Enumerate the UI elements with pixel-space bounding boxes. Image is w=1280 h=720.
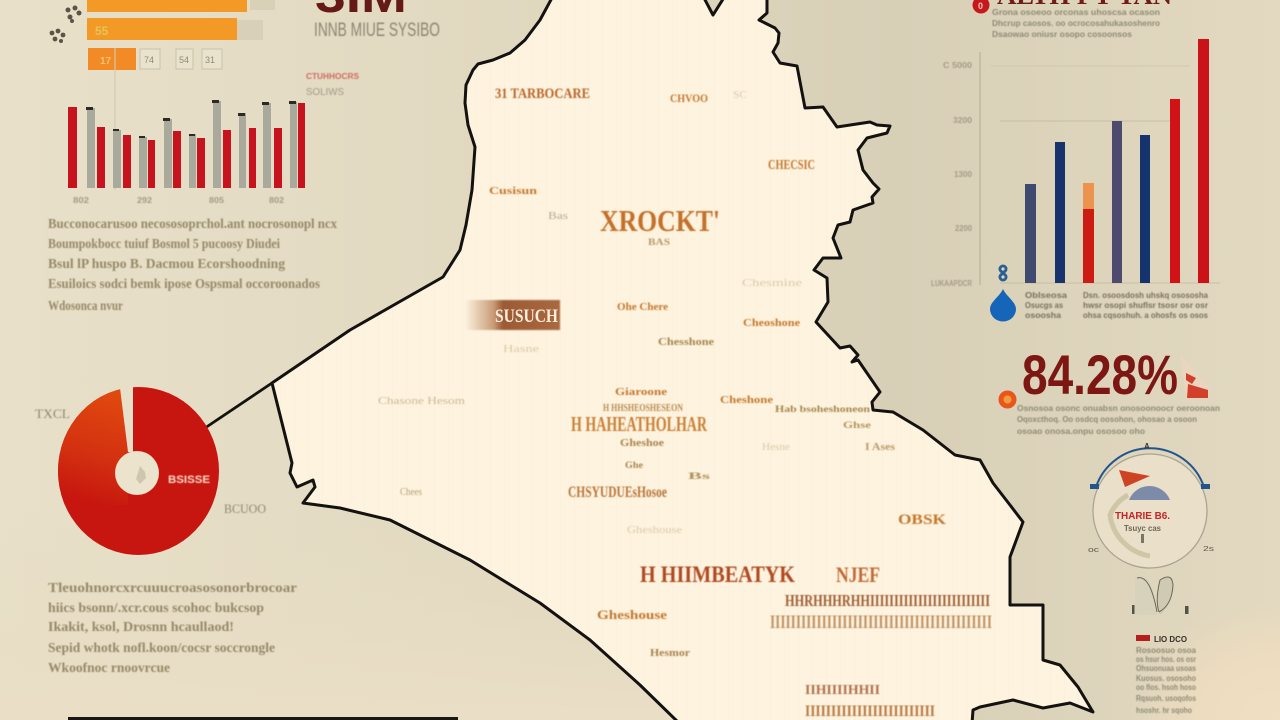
top orange progress bars: 74	[144, 55, 154, 65]
map labels: SC	[733, 90, 747, 101]
text block: top right	[992, 8, 1160, 39]
map labels: Hesne	[762, 442, 791, 453]
map labels: HHRHHHRHHIIIIIIIIIIIIIIIIIIIIIIIII	[785, 591, 990, 610]
map labels: Gheshouse	[597, 607, 667, 622]
top orange progress bars: 31	[205, 55, 215, 65]
text block: under right chart: Dsn. osoosdosh uhskq osososha	[1083, 291, 1209, 300]
circular gauge diagram: Tsuyc cas	[1124, 524, 1162, 533]
text block: lower right: Ohsuonuaa usoas	[1136, 664, 1196, 673]
map labels: H HHSHEOSHESEON	[603, 403, 684, 414]
bar chart: left: 802	[269, 196, 285, 205]
icon: orange circle	[998, 390, 1016, 408]
map labels: 31 TARBOCARE	[495, 86, 590, 102]
map labels: Bs	[688, 471, 711, 481]
text block: lower right	[1136, 646, 1197, 715]
icon: small blue glyph	[998, 264, 1008, 282]
text block: lower right: Rosoosuo osoa	[1136, 646, 1197, 655]
map labels: IIHIIIIHHII	[805, 683, 880, 698]
bottom black rule	[68, 717, 458, 720]
bar chart: left: 802	[73, 196, 90, 205]
map labels: Gheshouse	[627, 525, 683, 536]
text block: top right: Grona osoeoo orconas uhoscsa ocason	[992, 8, 1160, 17]
map of the country	[205, 0, 1093, 720]
top orange progress bars: 54	[179, 55, 189, 65]
map labels: Chasone Hesom	[378, 396, 465, 407]
bar chart: left: 805	[209, 196, 225, 205]
map labels: CHSYUDUEsHosoe	[568, 484, 667, 501]
map labels: H HAHEATHOLHAR	[571, 412, 708, 436]
text block: under right chart: Oblseosa	[1025, 291, 1068, 300]
map labels: IIIIIIIIIIIIIIIIIIIIIIIIIIIIIIIIIIIIIIIIIII	[770, 612, 992, 633]
map labels: Bas	[548, 211, 568, 222]
text block: top right: Dhcrup caosos. oo ocrocosahukasoshenro	[992, 19, 1160, 28]
map callout box	[465, 300, 560, 330]
map labels: Chesshone	[658, 336, 714, 348]
circular gauge diagram: THARIE B6.	[1115, 511, 1170, 522]
text block: lower right: hsoshr. hr sqoho	[1136, 706, 1192, 715]
chart legend: SOLIWS	[306, 87, 344, 98]
text block: upper left paragraph: Esuiloics sodci bemk ipose Ospsmal occoroonados	[48, 277, 321, 292]
top orange progress bars	[87, 0, 275, 190]
map labels: BAS	[648, 237, 670, 247]
bar chart: left: 292	[137, 196, 153, 205]
small heading lower right	[1136, 635, 1187, 644]
small heading lower right: LIO DCO	[1154, 635, 1187, 644]
map labels: XROCKT'	[600, 203, 720, 238]
circular gauge diagram: A	[1144, 442, 1150, 451]
map labels: Ghse	[843, 420, 871, 430]
map labels: Hesmor	[650, 648, 691, 659]
map labels: Hasne	[503, 344, 540, 355]
pie labels: BCUOO	[224, 501, 266, 516]
text block: upper left paragraph: Boumpokbocc tuiuf Bosmol 5 pucoosy Diudei	[48, 237, 280, 252]
text block: lower right: oo flos. hsoh hoso	[1136, 683, 1196, 692]
text block: lower left paragraph	[48, 581, 297, 676]
icon: footprints	[50, 6, 82, 43]
map labels	[378, 86, 992, 720]
text block: upper left paragraph: Bucconocarusoo necososoprchol.ant nocrosonopl ncx	[48, 217, 337, 232]
map labels: IIIIIIIIIIIIIIIIIIIIIIIII	[805, 703, 935, 720]
top orange progress bars: 55	[95, 24, 109, 38]
circular gauge diagram: 2s	[1203, 546, 1215, 553]
bar chart: left	[68, 100, 305, 205]
text block: lower left paragraph: Tleuohnorcxrcuuucroasosonorbrocoar	[48, 581, 297, 596]
map labels: CHECSIC	[768, 158, 815, 173]
text block: lower left paragraph: hiics bsonn/.xcr.cous scohoc bukcsop	[48, 601, 264, 616]
icon: red dot heading	[972, 0, 990, 14]
circular gauge diagram: oc	[1088, 547, 1100, 554]
text block: lower right: Kuosus. ososoho	[1136, 674, 1196, 683]
text block: under right chart: osoosha	[1025, 311, 1062, 320]
icon: twin vessels under gauge	[1132, 576, 1188, 615]
bar chart: right: LUKAAPDCR	[931, 279, 972, 288]
text block: under right chart: hwsr osopi shuflsr tsosr osr osr	[1083, 301, 1208, 310]
map labels: I Ases	[865, 442, 895, 453]
text block: under right chart	[1025, 291, 1209, 320]
map labels: Cusisun	[489, 186, 538, 197]
bar chart: right: C 5000	[943, 61, 973, 70]
bar chart: right	[931, 39, 1220, 288]
map labels: CHVOO	[670, 91, 708, 105]
text block: statistic description	[1017, 404, 1220, 436]
pie labels	[35, 406, 266, 516]
bar chart: right: 2200	[955, 224, 973, 233]
map labels: Cheshone	[720, 394, 773, 406]
big statistic: 84.28%	[1022, 343, 1178, 406]
map labels: Giaroone	[615, 386, 667, 398]
text block: upper left paragraph	[48, 217, 337, 314]
map labels: OBSK	[898, 512, 946, 528]
icon: paper fold	[1180, 354, 1210, 398]
map callout box: SUSUCH	[495, 306, 558, 327]
text block: upper left paragraph: Wdosonca nvur	[48, 299, 123, 314]
pie chart	[58, 380, 219, 555]
text block: statistic description: Oqoxcthoq. Oo osdcq oosohon, ohosao a osoon	[1017, 415, 1197, 424]
text block: lower left paragraph: Ikakit, ksol, Drosnn hcaullaod!	[48, 620, 234, 635]
text block: lower left paragraph: Sepid whotk nofl.koon/cocsr soccrongle	[48, 641, 275, 656]
map labels: Chees	[400, 487, 422, 498]
text block: statistic description: Osnosoa osonc onuabsn onosoonoocr oeroonoan	[1017, 404, 1220, 413]
top orange progress bars: 17	[100, 56, 112, 67]
text block: lower left paragraph: Wkoofnoc rnoovrcue	[48, 661, 170, 676]
circular gauge diagram	[1088, 442, 1215, 568]
bar chart: right: 1300	[954, 170, 973, 179]
map labels: NJEF	[836, 562, 880, 587]
map labels: Ghe	[625, 460, 643, 470]
map labels: H HIIMBEATYK	[640, 562, 795, 587]
map labels: Cheoshone	[743, 317, 800, 329]
text block: under right chart: Osucgs as	[1025, 301, 1064, 310]
text block: upper left paragraph: Bsul lP huspo B. Dacmou Ecorshoodning	[48, 257, 285, 272]
map labels: Ohe Chere	[617, 301, 668, 313]
subtitle: INNB MIUE SYSIBO	[314, 20, 440, 41]
map labels: Chesmine	[742, 278, 803, 289]
pie chart: BSISSE	[168, 474, 210, 486]
text block: lower right: Rqsuoh. usoqofos	[1136, 694, 1196, 703]
icon: water drop	[990, 289, 1016, 322]
chart legend: CTUHHOCRS	[306, 72, 360, 81]
map labels: Gheshoe	[620, 438, 665, 449]
text block: top right: Dsaowao oniusr osopo cosoonsos	[992, 30, 1133, 39]
map labels: Hab bsoheshoneon	[775, 404, 870, 414]
icon: red dot heading: 0	[978, 1, 983, 11]
text block: statistic description: osoao onosa.onpu ososoo oho	[1017, 427, 1145, 436]
chart legend	[306, 72, 360, 98]
pie labels: TXCL	[35, 406, 70, 421]
text block: under right chart: ohsa cqsoshuh. a ohosfs os osos	[1083, 311, 1209, 320]
text block: lower right: os hsur hos. os osr	[1136, 655, 1196, 664]
bar chart: right: 3200	[953, 116, 973, 125]
